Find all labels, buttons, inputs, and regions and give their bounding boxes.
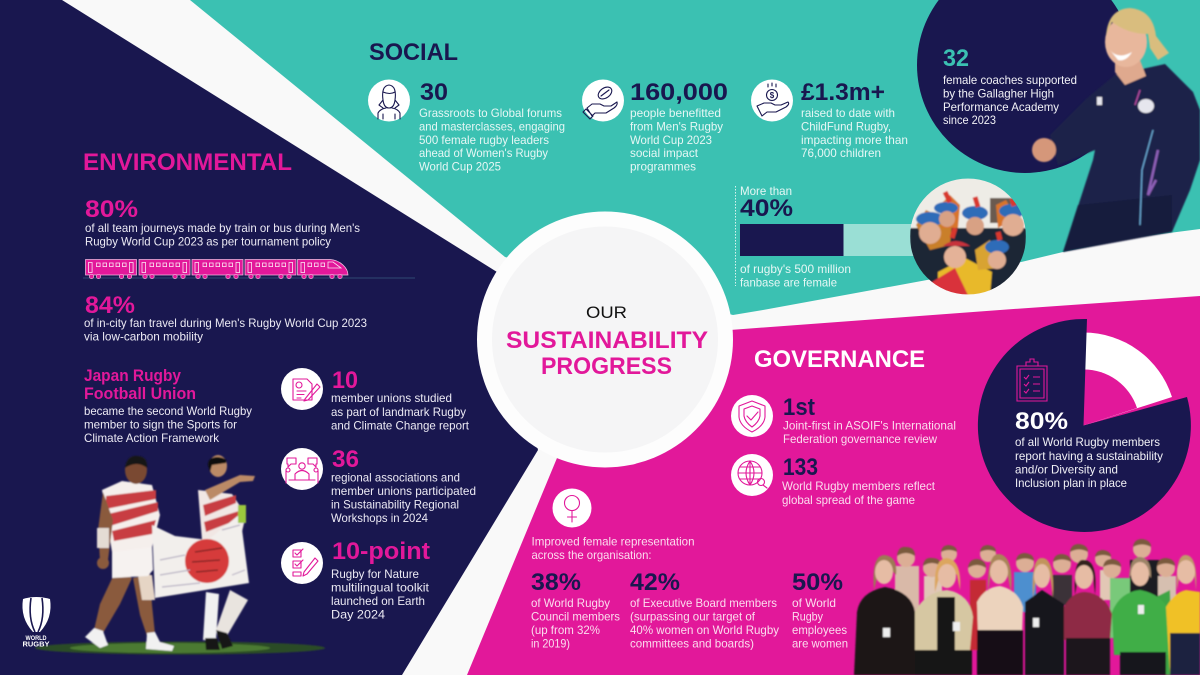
text block: Japan Rugby Football Union: member to sign the Sports for	[84, 418, 237, 432]
callout circle: 32 female coaches: 32	[943, 45, 969, 72]
callout circle: 32 female coaches: by the Gallagher High	[943, 86, 1054, 100]
icon: globe	[731, 454, 773, 496]
icon: checklist and pen	[281, 542, 323, 584]
panel: governance	[467, 296, 1200, 675]
bar chart: 40% female fanbase: fanbase are female	[740, 276, 837, 290]
icon: hand and coin	[751, 80, 793, 122]
text block: Japan Rugby Football Union: became the second World Rugby	[84, 404, 252, 418]
stat: 80% text: and/or Diversity and	[1015, 462, 1118, 476]
pie chart: 80% members with plan	[978, 319, 1191, 532]
stat: 10 member unions: 10	[332, 367, 358, 394]
stat: 160,000 people: social impact	[630, 146, 699, 160]
title: sustainability progress: SUSTAINABILITY	[506, 327, 708, 354]
stat: 30 forums	[419, 79, 565, 174]
stat: 80% team journeys: 80%	[85, 196, 138, 223]
stat: 133 members	[782, 454, 936, 507]
icon: woman	[368, 80, 410, 122]
stat: 80% text: of all World Rugby members	[1015, 435, 1160, 449]
stat: £1.3m+ raised: £1.3m+	[801, 79, 885, 106]
bar chart: 40% female fanbase: of rugby's 500 million	[740, 262, 851, 276]
stat: 36 regional associations: member unions participated	[331, 484, 476, 498]
bar chart: 40% female fanbase	[736, 184, 924, 290]
icon: report document	[281, 368, 323, 410]
stat: 80% team journeys	[85, 196, 360, 248]
text: improved female representation: across the organisation:	[532, 548, 652, 562]
stat: 50% employees	[792, 569, 848, 650]
stat: 160,000 people: World Cup 2023	[630, 133, 712, 147]
icon: hand and coin: $	[770, 91, 775, 100]
stat: 36 regional associations: 36	[332, 446, 359, 473]
stat: 42% executive board: 40% women on World Rugby	[630, 623, 779, 637]
text block: Japan Rugby Football Union: Football Union	[84, 385, 196, 403]
title: our: OUR	[586, 303, 627, 322]
stat: 80% text: Inclusion plan in place	[1015, 476, 1127, 490]
heading: governance: GOVERNANCE	[754, 346, 925, 373]
text: improved female representation	[532, 534, 694, 562]
icon: shield	[731, 395, 773, 437]
stat: 1st governance review	[783, 394, 956, 446]
stat: 36 regional associations: Workshops in 2024	[331, 511, 428, 525]
icon: train	[83, 260, 415, 279]
stat: 38% council members: (up from 32%	[531, 623, 600, 637]
stat: 38% council members: 38%	[531, 569, 581, 596]
stat: 50% employees: are women	[792, 636, 848, 650]
stat: 1st governance review: Federation governance review	[783, 432, 937, 446]
stat: 84% fan travel: 84%	[85, 292, 135, 319]
stat: 1st governance review: 1st	[783, 394, 815, 421]
centre circle: our sustainability progress	[477, 212, 733, 468]
stat: 50% employees: of World	[792, 596, 836, 610]
stat: 50% employees: employees	[792, 623, 847, 637]
stat: 36 regional associations: in Sustainability Regional	[331, 498, 459, 512]
stat: £1.3m+ raised: ChildFund Rugby,	[801, 120, 891, 134]
stat: 80% text: report having a sustainability	[1015, 449, 1163, 463]
text block: Japan Rugby Football Union	[84, 367, 252, 445]
text block: Japan Rugby Football Union: Japan Rugby	[84, 367, 182, 385]
stat: £1.3m+ raised	[801, 79, 908, 160]
title: sustainability progress	[506, 327, 708, 380]
logo: World Rugby: RUGBY	[22, 642, 50, 648]
stat: 50% employees: Rugby	[792, 610, 823, 624]
stat: 10 member unions: as part of landmark Rugby	[331, 405, 466, 419]
stat: 10-point toolkit: multilingual toolkit	[331, 580, 430, 594]
icon: workshop group	[281, 448, 323, 490]
photo: World Rugby staff group	[854, 539, 1200, 675]
bar chart: 40% female fanbase: More than	[740, 184, 792, 198]
stat: 10 member unions: and Climate Change report	[331, 418, 470, 432]
stat: 80% text	[1015, 408, 1163, 490]
stat: 42% executive board: 42%	[630, 569, 680, 596]
callout circle: 32 female coaches: female coaches supported	[943, 73, 1077, 87]
stat: 160,000 people: from Men's Rugby	[630, 120, 723, 134]
icon: clipboard	[1017, 359, 1047, 401]
logo: World Rugby	[22, 597, 51, 648]
stat: 10-point toolkit: launched on Earth	[331, 594, 425, 608]
stat: 30 forums: ahead of Women's Rugby	[419, 146, 548, 160]
panel: environmental	[0, 0, 538, 675]
stat: 30 forums: 500 female rugby leaders	[419, 133, 549, 147]
stat: 30 forums: World Cup 2025	[419, 160, 501, 174]
stat: 38% council members	[531, 569, 620, 650]
stat: £1.3m+ raised: raised to date with	[801, 106, 895, 120]
stat: 160,000 people: programmes	[630, 160, 696, 174]
panel: social	[190, 0, 1200, 315]
stat: 84% fan travel: of in-city fan travel during Men's Rugby World Cup 2023	[84, 316, 367, 330]
stat: 36 regional associations	[331, 446, 476, 525]
heading: social: SOCIAL	[369, 39, 458, 66]
stat: 30 forums: 30	[420, 79, 448, 106]
photo: female fans	[910, 178, 1026, 295]
icon: hand and rugby ball	[582, 80, 624, 122]
stat: 80% team journeys: Rugby World Cup 2023 as per tournament policy	[85, 234, 331, 248]
stat: 38% council members: Council members	[531, 610, 620, 624]
stat: 38% council members: in 2019)	[531, 636, 570, 650]
stat: 42% executive board: of Executive Board members	[630, 596, 777, 610]
stat: 133 members: global spread of the game	[782, 493, 915, 507]
stat: 42% executive board: (surpassing our target of	[630, 610, 756, 624]
stat: 133 members: World Rugby members reflect	[782, 479, 936, 493]
heading: environmental: ENVIRONMENTAL	[83, 149, 292, 176]
stat: 38% council members: of World Rugby	[531, 596, 610, 610]
stat: 84% fan travel	[84, 292, 367, 344]
stat: 84% fan travel: via low-carbon mobility	[84, 330, 203, 344]
callout circle: 32 female coaches: Performance Academy	[943, 100, 1059, 114]
photo: Japan players with flag	[35, 455, 325, 654]
callout circle: 32 female coaches	[917, 0, 1133, 173]
stat: 10 member unions	[331, 367, 470, 432]
stat: 10-point toolkit	[331, 538, 430, 622]
stat: 42% executive board: committees and boards)	[630, 636, 754, 650]
stat: 80% team journeys: of all team journeys made by train or bus during Men's	[85, 221, 360, 235]
photo: female coach	[1032, 8, 1200, 252]
stat: 42% executive board	[630, 569, 779, 650]
stat: £1.3m+ raised: impacting more than	[801, 133, 908, 147]
text: improved female representation: Improved female representation	[532, 534, 694, 548]
stat: 10-point toolkit: 10-point	[332, 538, 430, 565]
text block: Japan Rugby Football Union: Climate Action Framework	[84, 431, 220, 445]
callout circle: 32 female coaches: since 2023	[943, 113, 996, 127]
logo: World Rugby: WORLD	[26, 636, 47, 642]
stat: 30 forums: and masterclasses, engaging	[419, 120, 565, 134]
stat: 80% text: 80%	[1015, 408, 1068, 435]
stat: 10-point toolkit: Rugby for Nature	[331, 567, 419, 581]
stat: 50% employees: 50%	[792, 569, 843, 596]
stat: 133 members: 133	[783, 454, 818, 481]
stat: £1.3m+ raised: 76,000 children	[801, 146, 881, 160]
stat: 160,000 people: people benefitted	[630, 106, 721, 120]
stat: 1st governance review: Joint-first in ASOIF's International	[783, 418, 956, 432]
title: sustainability progress: PROGRESS	[541, 353, 672, 380]
icon: female symbol	[552, 488, 592, 528]
stat: 160,000 people: 160,000	[630, 79, 728, 106]
stat: 30 forums: Grassroots to Global forums	[419, 106, 562, 120]
stat: 10-point toolkit: Day 2024	[331, 608, 385, 622]
stat: 10 member unions: member unions studied	[331, 391, 452, 405]
stat: 160,000 people	[630, 79, 728, 174]
stat: 36 regional associations: regional associations and	[331, 470, 460, 484]
bar chart: 40% female fanbase: 40%	[740, 195, 793, 222]
